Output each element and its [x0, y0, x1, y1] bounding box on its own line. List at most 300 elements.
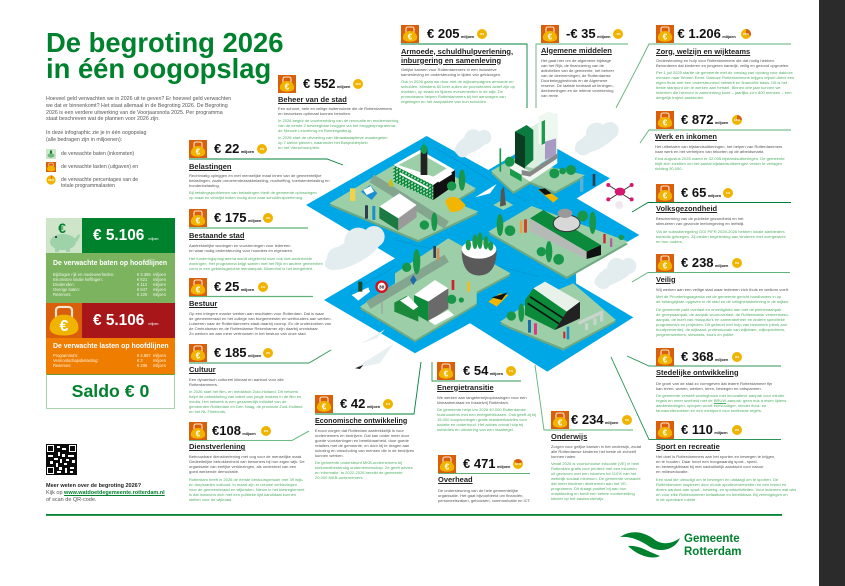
description: We werken aan langetermijnoplossingen voor een	[437, 394, 527, 400]
description: Ondersteuning en hulp voor Rotterdammers die dat nodig hebben.	[656, 58, 775, 62]
leader lines	[189, 44, 791, 474]
achievement: Vanaf 2026 is voorschoolse educatie (VE) in heel	[551, 460, 639, 466]
description: belastingen, zoals onroerendezaakbelasting, rioolheffing, toeristenbelasting en	[189, 178, 330, 183]
list labels: Reserves:	[53, 363, 71, 368]
achievement	[189, 388, 302, 414]
achievement: eigen thuis met een ondersteunend netwerk en financiële basis. Dit is het	[656, 80, 787, 85]
achievement: programma. Dit draagt positief bij aan hun	[551, 486, 626, 491]
percentage coin: 2%	[264, 429, 268, 433]
achievement: aanpak, de inzet van mosquito's en camerabeheer en andere specifieke	[656, 317, 785, 322]
icon: percentage coin: 10%	[48, 178, 54, 182]
background behind page	[819, 0, 845, 586]
achievement: uit gezinnen met een inkomen tot 110% van het	[551, 471, 636, 476]
heading: Cultuur	[189, 365, 216, 374]
description: Een schone, hele en veilige buitenruimte die de Rotterdammers	[278, 106, 392, 111]
percentage coin: 4%	[480, 32, 484, 36]
description	[401, 66, 501, 77]
percentage coin	[513, 459, 523, 469]
achievement: iedereen die hiervoor in aanmerking komt – jaarlijks zo'n 800 mensen – een	[656, 90, 792, 95]
achievement: en het NL Filmfonds.	[189, 409, 226, 414]
panel: Werk en inkomen	[656, 111, 796, 173]
amount: € 238 miljoen	[681, 255, 728, 270]
list amounts: € 3.385	[137, 272, 151, 277]
panel: Economische ontwikkeling	[315, 395, 415, 487]
description	[438, 488, 531, 503]
icon: purse	[656, 348, 674, 366]
achievement: Rotterdam heeft in 2026 de eerste bestuursperiode met 39 wijk-	[189, 476, 303, 482]
description	[189, 454, 305, 474]
percentage coin	[613, 29, 623, 39]
achievement: dat meer kinderen deelnemen aan het VE-	[551, 481, 627, 486]
heading: inburgering en samenleving	[401, 56, 501, 64]
QR text	[46, 483, 165, 503]
list labels	[53, 272, 114, 297]
intro text: we dat er binnenkomt? Het staat allemaal in de Begroting 2026. De Begroting	[46, 103, 228, 109]
achievement: jongerenwerkers, stewards, boa's en politie	[656, 332, 733, 337]
achievement	[656, 228, 786, 244]
amount: -€ 35 miljoen	[566, 26, 610, 41]
achievement: de Nieuwe Leuvebrug en Boerengatbrug.	[278, 128, 352, 133]
saldo: Saldo € 0	[72, 381, 149, 401]
list amounts: € 220	[137, 292, 147, 297]
icon: purse: €	[663, 192, 668, 200]
heading: Energietransitie	[437, 382, 494, 392]
percentage coin	[732, 425, 742, 435]
heading: Onderwijs	[551, 432, 587, 440]
icon: purse	[401, 25, 419, 43]
achievement: gemeenten Rotterdam en Den Haag, de provincie Zuid-Holland	[189, 404, 302, 409]
amount: € 185 miljoen	[214, 345, 261, 360]
description: de gemeenteraad en het college van burgemeester en wethouders aan werken.	[189, 316, 332, 321]
percentage coin	[263, 348, 273, 358]
heading: Stedelijke ontwikkeling	[656, 368, 739, 376]
list labels	[53, 353, 99, 368]
icon: percentage coin	[46, 175, 56, 185]
list amounts: € 206	[137, 363, 147, 368]
drone	[606, 183, 634, 209]
description: Het uitbetalen van bijstandsuitkeringen, het helpen van Rotterdammers	[655, 144, 782, 148]
amount: € 471 miljoen	[463, 456, 510, 471]
icon: purse: €	[196, 430, 201, 438]
percentage coin: 4%	[266, 351, 270, 355]
list labels: Reserves:	[53, 292, 71, 297]
description: Wij werken aan een veilige stad waar iedereen zich thuis en welkom voelt.	[656, 286, 789, 292]
percentage coin	[258, 282, 268, 292]
pot tower	[462, 232, 497, 276]
description: klimaatneutraal en fossielvrij Rotterdam.	[437, 400, 509, 405]
achievement: Rotterdam gratis voor peuters met een inkomen	[551, 466, 637, 471]
achievement: programma's en projecten. Dit gebeurt met hulp van bewoners (denk aan	[656, 322, 787, 327]
water	[306, 136, 639, 372]
list labels: Vennootschapsbelasting:	[53, 358, 99, 363]
achievement: is dat inwoners zich met een politieke lijst kandidaat kunnen	[189, 492, 296, 497]
achievement	[315, 460, 413, 480]
achievement: en voor elke Rotterdammer betaalbaar en bereikbaar. Bij verenigingen en	[656, 492, 788, 497]
solar panels	[578, 312, 603, 330]
achievement: van de eerste 2 beweegbare bruggen via het bruggenprogramma:	[278, 123, 396, 128]
amount: € 110 miljoen	[681, 422, 728, 437]
description: Doorbelegginsfonds en de Algemene	[541, 78, 607, 83]
amount: € 25 miljoen	[214, 279, 254, 294]
QR text: of scan de QR-code.	[46, 497, 96, 503]
percentage coin	[741, 29, 751, 39]
heading: Belastingen	[189, 162, 232, 171]
description: Aantrekkelijke woningen en voorzieningen voor iedereen	[189, 243, 290, 248]
list units: miljoen	[153, 282, 166, 287]
list amounts: € 4.897	[137, 353, 151, 358]
lamp post	[498, 148, 503, 172]
percentage coin: 0%	[260, 147, 264, 151]
heading: Economische ontwikkeling	[315, 416, 407, 424]
description: van de deelnemingen, de Rotterdamse	[541, 73, 611, 78]
percentage coin: 1%	[509, 369, 513, 373]
logo text: Gemeente	[684, 533, 740, 545]
list labels: Dividenden:	[53, 282, 75, 287]
achievement: Bij betalingsproblemen van belastingen biedt de gemeente oplossingen	[189, 190, 317, 195]
icon: purse	[656, 25, 674, 43]
percentage coin: 25%	[743, 32, 749, 36]
icon: purse	[189, 344, 207, 362]
intro text	[46, 96, 231, 122]
achievement	[656, 476, 796, 502]
description: Bescherming van de publieke gezondheid en het	[656, 216, 744, 220]
list units: miljoen	[153, 358, 166, 363]
amount: € 54 miljoen	[463, 363, 503, 378]
logo text	[684, 533, 742, 558]
description	[541, 58, 614, 98]
description: retailers met de gemeente, en door bij te dragen aan	[315, 443, 409, 448]
icon: purse: €	[444, 370, 449, 378]
achievement: Ook in 2026 gaan we door met de wijkcampagnes armoede en	[401, 78, 513, 84]
icon: purse	[541, 25, 559, 43]
legend intro	[46, 130, 146, 142]
description	[551, 444, 641, 459]
achievement: De gemeente ondersteunt MKB-ondernemers bij	[315, 460, 402, 464]
icon: purse: €	[663, 118, 668, 128]
road sign: 30	[379, 285, 385, 291]
list amounts: € 113	[137, 282, 147, 287]
description: reserve. De laatste bedraait uit leningen,	[541, 83, 614, 88]
heading: Bestaande stad	[189, 231, 244, 240]
list amounts: € 847	[137, 287, 147, 292]
achievement: helpt de ontwikkeling van talent van jonge makers in de film en	[189, 394, 301, 399]
percentage coin: 1%	[386, 402, 390, 406]
achievement: vorm in een gebiedsgerichte leenaanpak. Bloemhof is het leergebied.	[189, 266, 313, 271]
road sign	[375, 280, 388, 314]
description: van rente.	[541, 93, 559, 98]
achievement: op 7 kleine pleinen, waaronder het Bospolderplein	[278, 140, 368, 145]
description: goed werkende democratie.	[189, 469, 239, 474]
panel: Algemene middelen	[541, 25, 626, 100]
achievement	[655, 156, 785, 171]
achievement: op maat en verwijst indien nodig door naar schuldhulpverlening.	[189, 195, 303, 200]
description: deelnemingen en de interne verrekening	[541, 88, 613, 93]
percentage coin: 11%	[355, 82, 361, 86]
achievement: Via de subsidieregeling GGI PIFR 2025-2026 hebben lokale aanbieders	[656, 228, 785, 234]
achievement: en dorpsraden voltooid. In maart zijn er nieuwe verkiezingen	[189, 482, 297, 487]
description: kunnen werken.	[315, 453, 344, 458]
description: de Ombudsman en de Rotterdamse Rekenkamer zijn daarbij onmisbaar.	[189, 326, 319, 331]
description	[656, 58, 789, 68]
heading: De verwachte baten op hoofdlijnen	[53, 260, 167, 267]
icon: purse: €	[558, 418, 563, 428]
amount: € 368 miljoen	[681, 349, 728, 364]
description: Het doel is Rotterdammers aan het sporten en bewegen te krijgen,	[656, 454, 775, 458]
icon: purse: €	[445, 462, 450, 472]
percentage coin: 2%	[735, 428, 739, 432]
bottom rule	[46, 514, 782, 516]
amount: € 234 miljoen	[571, 412, 618, 427]
achievement: aanbestedingen, oplopen wordt eenvoudiger, minder flora- en	[656, 403, 766, 408]
achievement: subsidie gekregen. Zij bieden begeleiding aan kinderen met overgewicht	[656, 234, 786, 239]
description	[189, 310, 332, 336]
description	[315, 428, 414, 458]
percentage coin: 5%	[625, 418, 629, 422]
title: in één oogopslag	[46, 53, 271, 84]
icon: purse: €	[548, 32, 553, 42]
description: scholing en omscholing van mensen die in de bedrijven	[315, 448, 414, 453]
description: personeelszaken, gebouwen, communicatie en ICT.	[438, 498, 531, 503]
icon: purse	[656, 184, 674, 202]
achievement: regels en meer snelheid met de BRUW-aanpak: geen eds a eisen lijdens	[656, 398, 786, 403]
intro text: 2026 is een verdere uitwerking van de Voorjaarsnota 2025. Per programma	[46, 110, 223, 116]
list labels: Bijdragen rijk en medeoverheden:	[53, 272, 114, 277]
achievement: ontwikkeling en biedt een betere voorbereiding	[551, 491, 635, 496]
percentage coin: 1%	[726, 191, 730, 195]
legend: percentages: de verwachte percentages van de	[61, 177, 138, 183]
achievement	[656, 294, 789, 304]
museum and disc	[530, 209, 601, 259]
icon: purse	[189, 422, 207, 440]
achievement: faunaonderzoeken en een meldpunt voor knelbrede regels.	[656, 408, 762, 413]
logo text: Rotterdam	[684, 546, 742, 558]
town hall	[393, 142, 455, 200]
achievement	[189, 256, 323, 271]
description	[189, 173, 330, 188]
achievement: De gemeente verstelt woningbouw met innovatieve aanpak voor minder	[656, 392, 784, 398]
icon: purse	[437, 362, 455, 380]
list labels: Overige baten:	[53, 287, 80, 292]
description	[189, 243, 293, 253]
description: Gelijke kansen voor Rotterdammers in een inclusieve	[401, 66, 497, 72]
description	[656, 380, 772, 391]
achievement: toekomstbestendig ondernemerschap. Ze geeft advies	[315, 465, 413, 470]
achievement: Eind augustus 2025 waren er 32.035 bijstandsuitkeringen. De gemeente	[655, 156, 785, 160]
icon: purse: €	[196, 148, 201, 156]
heading	[401, 46, 513, 64]
description	[278, 106, 392, 116]
panel: Sport en recreatie	[656, 421, 796, 502]
achievement: huishoudens met een energiebklussen. Ook geeft zij bij	[437, 412, 536, 417]
heading: Armoede, schuldhulpverlening,	[401, 46, 513, 56]
heading: De verwachte lasten op hoofdlijnen	[53, 343, 169, 350]
tile edges	[329, 156, 628, 351]
description	[656, 454, 775, 474]
canal lines	[350, 147, 539, 293]
description: samenleving en ondersteuning in tijden van geldzorgen.	[401, 72, 501, 77]
icon: purse: €	[285, 82, 290, 92]
achievement: 15.000 koopwoningen gratis maatwerkadvies voor	[437, 417, 527, 422]
statue	[493, 187, 513, 210]
percentage coin: 18%	[734, 118, 740, 122]
saldo	[46, 374, 175, 409]
achievement: wettelijk sociaal minimum. De gemeente verwacht	[551, 476, 641, 481]
panel: Dienstverlening	[189, 422, 309, 502]
description: De groei van de stad zo vormgeven dat iedere Rotterdammer fijn	[656, 380, 772, 386]
achievement	[437, 406, 536, 432]
achievement	[278, 118, 398, 133]
description: Rotterdammers.	[189, 382, 218, 387]
achievement: regelingen en het aanpakken van hun schulden.	[401, 99, 487, 104]
percentage coin	[263, 213, 273, 223]
land tiles	[329, 153, 628, 348]
description: Zo werken we aan meer vertrouwen in het bestuur van onze stad.	[189, 331, 307, 336]
icon: purse	[46, 162, 56, 172]
list units	[153, 272, 166, 297]
amount: € 1.206 miljoen	[678, 26, 736, 41]
achievement	[656, 306, 789, 337]
description: organisatie van eerlijke verkiezingen, als onderdeel van een	[189, 464, 296, 469]
panel: Energietransitie	[437, 362, 537, 433]
icon: purse: €	[408, 32, 413, 42]
panel: Overhead	[438, 455, 538, 503]
percentage coin: 4%	[266, 216, 270, 220]
icon: purse: €	[663, 428, 668, 438]
legend	[46, 149, 138, 189]
icon: purse	[278, 75, 296, 93]
tower cluster	[510, 112, 557, 182]
achievement: de belangrijkste opgaven in de stad en de veiligheidsbeleving in de wijken.	[656, 299, 789, 304]
amount: € 22 miljoen	[214, 141, 254, 156]
description	[655, 144, 782, 154]
lasten breakdown	[46, 338, 175, 374]
trees	[402, 157, 624, 322]
icon: purse large	[46, 303, 82, 338]
achievement	[189, 190, 317, 200]
achievement	[656, 70, 794, 100]
description: alle Rotterdamse kinderen het beste uit zichzelf	[551, 449, 636, 454]
legend: baten: de verwachte baten (inkomsten)	[61, 151, 134, 157]
percentage coin	[353, 79, 363, 89]
description: Een dynamisch cultureel klimaat en aanbod voor alle	[189, 376, 284, 382]
percentage coin	[622, 415, 632, 425]
baten total	[82, 218, 175, 253]
heading: Sport en recreatie	[656, 442, 720, 450]
logo swoosh	[620, 532, 680, 558]
description: stimuleren van gezonde leefomgeving en leefstijl.	[656, 221, 744, 226]
description: en beweegklimaat bij met nadrukkelijk aandacht voor natuur	[656, 464, 764, 469]
icon: purse	[315, 395, 333, 413]
amount: €108 miljoen	[212, 423, 256, 438]
list amounts	[137, 353, 151, 368]
icon: purse	[189, 209, 207, 227]
description: hondenbelasting.	[189, 183, 220, 188]
description: De ondersteuning van de hele gemeentelijke	[438, 488, 518, 492]
heading: Algemene middelen	[541, 46, 612, 54]
amount: € 175 miljoen	[214, 210, 261, 225]
achievement: de groepsaanpak, de aanpak woonoverlast, de Rotterdamse verkeersaso-	[656, 312, 789, 317]
percentage coin: -1%	[615, 32, 621, 36]
list labels: Programma's:	[53, 353, 78, 358]
list amounts	[137, 272, 151, 297]
icon: purse	[551, 411, 569, 429]
legend: percentages: totale programmalasten	[61, 183, 115, 189]
icon: piggy bank large: €	[58, 220, 66, 236]
achievement	[189, 476, 304, 502]
lasten total: € 5.106 miljoen	[93, 312, 158, 329]
intro text: Hoeveel geld verwachten we in 2026 uit te geven? Er hoeveel geld verwachten	[46, 96, 231, 102]
achievement: isolatie en onderhoud. Het advies omvat hulp bij	[437, 422, 523, 427]
panel: Veilig	[656, 254, 796, 337]
achievement: in de openbare ruimte	[656, 497, 695, 502]
achievement: subsidies en uitvoering van een maatregel.	[437, 427, 514, 432]
amount: € 205 miljoen	[427, 26, 474, 41]
baten breakdown	[46, 253, 175, 303]
panel: Bestaande stad	[189, 209, 323, 271]
achievement: schulden. Minstens 60 keer zullen de promoteams actief zijn op	[401, 84, 515, 89]
panel: Zorg, welzijn en wijkteams	[656, 25, 796, 102]
amount: € 65 miljoen	[681, 185, 721, 200]
list units: miljoen	[153, 353, 166, 358]
achievement: In 2026 begint de voorbereiding van de renovatie en modernisering	[278, 118, 398, 123]
achievement	[401, 78, 515, 104]
list amounts: € 521	[137, 277, 147, 282]
achievement: De gemeente pakt overlast en onveiligheid aan met de pleinenaanpak	[656, 306, 781, 312]
achievement: buurtpreventie), de wijkraad, professionals van wijkteam, wijkopzichters,	[656, 327, 785, 332]
amount: € 552 miljoen	[303, 76, 350, 91]
description: en waar nodig ondersteuning voor huurders en eigenaren.	[189, 248, 293, 253]
panel: Bestuur	[189, 278, 332, 336]
percentage coin	[723, 188, 733, 198]
list labels: Inkomsten lokale heffingen:	[53, 277, 103, 282]
icon: purse	[189, 140, 207, 158]
panel: baten en lasten	[46, 218, 175, 409]
description: Rechtmatig opleggen en met menselijke maat innen van de gemeentelijke	[189, 173, 322, 178]
heading: Werk en inkomen	[655, 132, 717, 140]
panel: Belastingen	[189, 140, 330, 200]
percentage coin: 8%	[735, 355, 739, 359]
QR text: Kijk op www.watdoetdegemeente.rotterdam.nl	[46, 490, 165, 496]
baten total: € 5.106 miljoen	[93, 227, 158, 244]
icon: piggy bank	[46, 149, 56, 159]
description: Betrouwbare dienstverlening met oog voor de menselijke maat.	[189, 454, 302, 458]
lasten total	[82, 303, 175, 338]
legend intro: In deze infographic zie je in één oogopslag	[46, 130, 146, 136]
panel: Volksgezondheid	[656, 184, 796, 244]
description: Gedeeltelijke betrokkenheid van bewoners bij hun eigen wijk. De	[189, 459, 305, 464]
achievement: blijft zich inzetten om het aantal bijstandsuitkeringen verder te verlagen	[655, 161, 782, 166]
description: Zorgen voor gelijke kansen in het onderwijs, zodat	[551, 444, 641, 448]
achievement: Per 1 juli 2025 startte de gemeente met de omslag van opvang voor dakloze	[656, 70, 793, 74]
boats	[352, 188, 558, 307]
percentage coin	[732, 352, 742, 362]
achievement: De gemeente helpt t/m 2026 40.000 Rotterdamse	[437, 406, 526, 412]
icon: purse: €	[663, 262, 668, 270]
description: kan leven: wonen, werken, leren, bewegen en ontspannen.	[656, 386, 762, 391]
percentage coin: 1%	[261, 285, 265, 289]
panel: Beheer van de stad	[278, 75, 398, 150]
percentage coin	[261, 426, 271, 436]
achievement: en informatie. In 2022-2026 bereikt de gemeente	[315, 470, 403, 475]
icon: purse	[438, 455, 456, 473]
amount: € 42 miljoen	[340, 396, 380, 411]
list units	[153, 353, 166, 368]
achievement: markten, op straat en tijdens evenementen in de wijk. De	[401, 89, 503, 94]
icon: piggy bank large	[46, 218, 82, 253]
description: goede voorzieningen en bereikbaarheid, door goede	[315, 438, 409, 443]
description: ondernemers en bedrijven. Dat kan onder meer door	[315, 433, 409, 438]
checker building	[379, 193, 417, 231]
